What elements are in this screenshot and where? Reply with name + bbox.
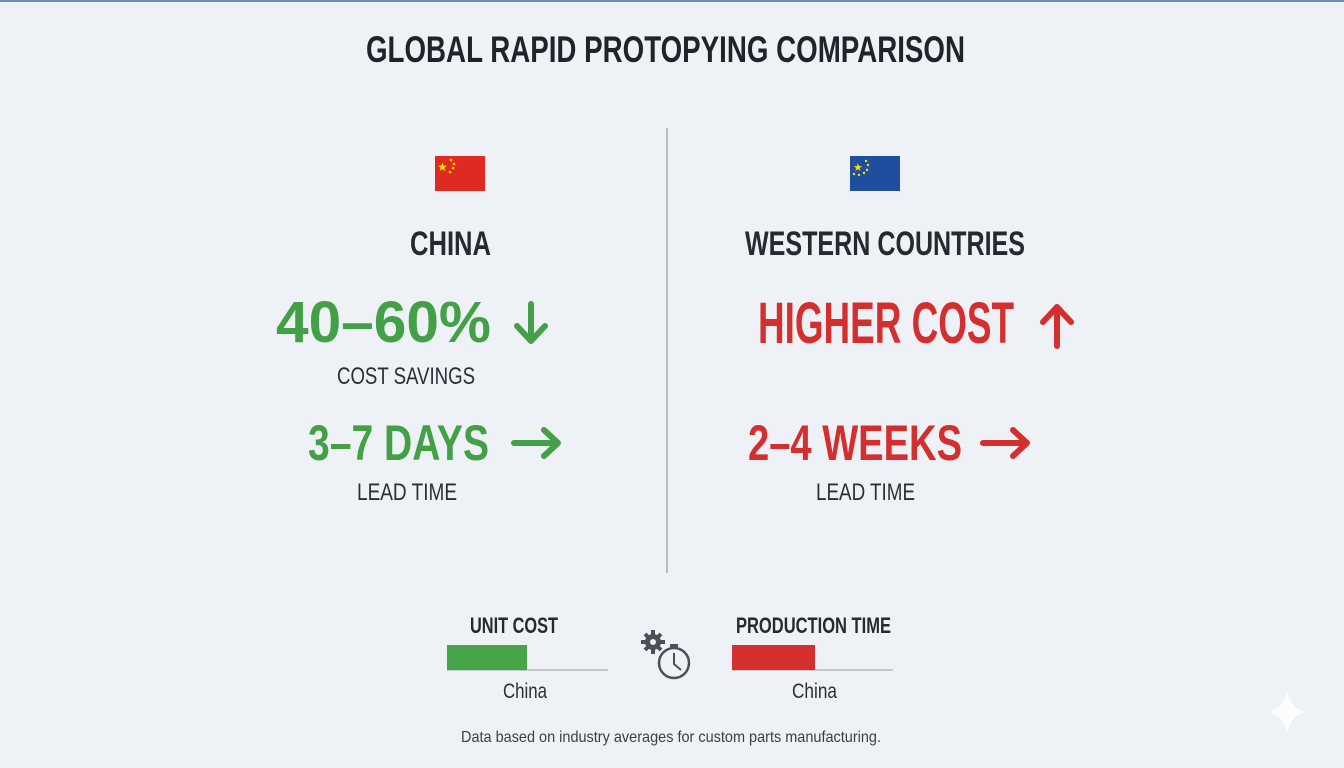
stat: cost savings: COST SAVINGS — [337, 363, 475, 390]
stat: lead time china: 3–7 DAYS — [308, 415, 489, 471]
heading: western countries: WESTERN COUNTRIES — [745, 225, 1025, 263]
chart: production time: China — [792, 680, 837, 703]
icon: gear and stopwatch — [641, 630, 689, 678]
panel: western — [745, 156, 1071, 506]
panel: china — [276, 156, 558, 506]
chart: unit cost: China — [503, 680, 547, 703]
icon: right arrow red — [983, 430, 1027, 456]
stat: higher cost: HIGHER COST — [758, 291, 1014, 356]
icon: right arrow — [514, 430, 558, 456]
chart: unit cost — [447, 613, 608, 703]
icon: up arrow — [1043, 307, 1071, 346]
icon: sparkle — [1268, 690, 1306, 734]
icon: eu flag — [850, 156, 900, 191]
heading: china: CHINA — [410, 225, 491, 263]
stat: cost savings — [276, 290, 545, 390]
stat: lead time western: LEAD TIME — [816, 479, 915, 506]
icon: china flag — [435, 156, 485, 191]
chart: production time: PRODUCTION TIME — [736, 613, 891, 638]
icon: eu flag: ★ — [853, 162, 863, 174]
stat: lead time china — [308, 415, 558, 506]
footnote: Data based on industry averages for custom parts manufacturing. — [461, 729, 881, 746]
stat: cost savings: 40–60% — [276, 290, 491, 355]
icon: down arrow — [517, 304, 545, 341]
chart: unit cost: UNIT COST — [470, 613, 558, 638]
stat: lead time china: LEAD TIME — [357, 479, 457, 506]
title: GLOBAL RAPID PROTOPYING COMPARISON — [366, 29, 965, 70]
icon: china flag: ★ — [437, 160, 448, 174]
chart: production time — [732, 613, 893, 703]
stat: lead time western — [748, 415, 1027, 506]
stat: lead time western: 2–4 WEEKS — [748, 415, 962, 471]
